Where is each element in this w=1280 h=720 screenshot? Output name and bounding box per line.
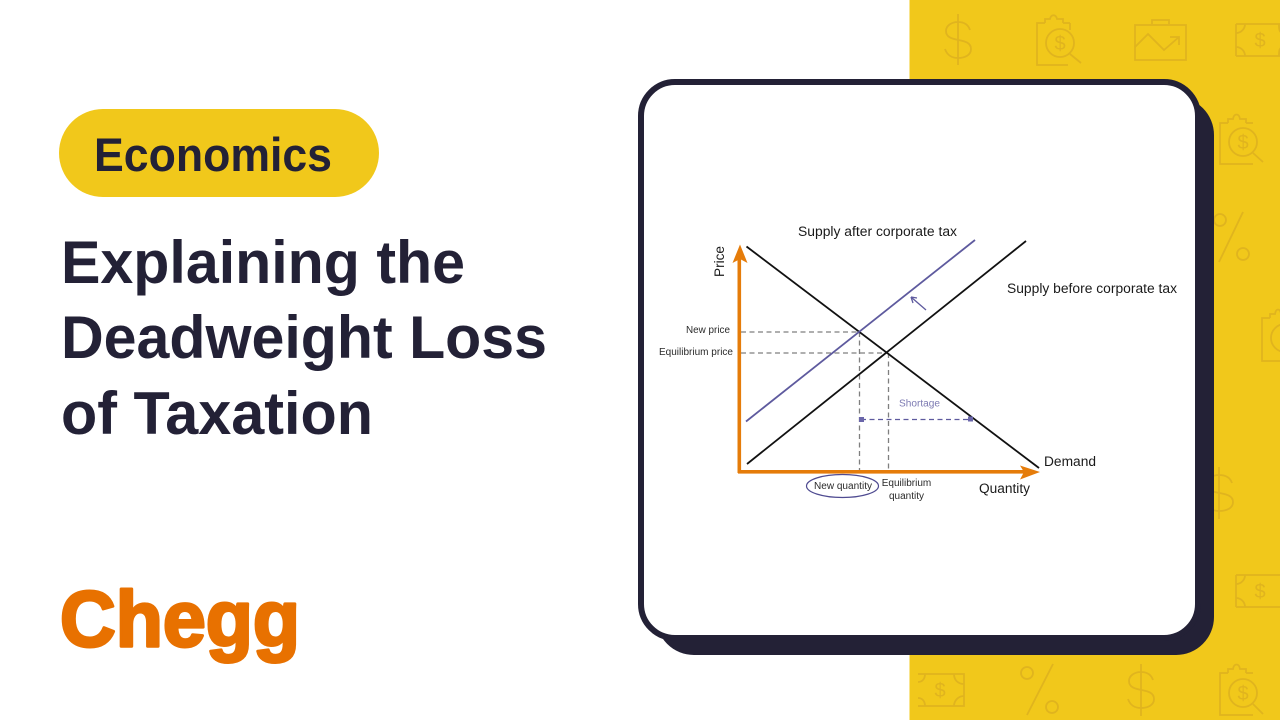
supply and demand chart (659, 224, 1177, 502)
icon: clipboard search bottom: $ (1237, 683, 1249, 705)
label: new price: New price (686, 325, 730, 336)
icon: clipboard search top (1037, 15, 1081, 65)
label: shortage: Shortage (899, 398, 940, 410)
icon: dollar right (1206, 467, 1233, 519)
label: demand: Demand (1044, 454, 1096, 469)
icon: money right: $ (1254, 581, 1266, 603)
icon: dollar bottom (1128, 664, 1154, 716)
supply before tax line (747, 241, 1026, 464)
title: of Taxation (61, 380, 373, 447)
shift arrow (911, 297, 926, 310)
yellow background panel (910, 0, 1280, 720)
category pill: Economics (94, 128, 332, 181)
label: quantity: Quantity (979, 481, 1030, 496)
shortage indicator (859, 416, 973, 422)
title: Deadweight Loss (61, 304, 547, 371)
icon: clipboard search right (1220, 114, 1263, 164)
icon: briefcase chart (1135, 20, 1186, 60)
label: equilibrium price: Equilibrium price (659, 347, 733, 358)
Chegg logo: Chegg (60, 574, 300, 663)
demand line (746, 246, 1039, 468)
dashed guide lines (741, 332, 888, 471)
icon pattern (918, 14, 1280, 716)
icon: clipboard search partial (1262, 310, 1280, 361)
label: new quantity: New quantity (814, 481, 872, 492)
icon: money top: $ (1254, 30, 1266, 52)
icon: clipboard search top: $ (1054, 33, 1066, 55)
icon: money top (1236, 24, 1280, 56)
icon: money bottom (918, 674, 964, 706)
icon: money right (1236, 575, 1280, 607)
label: equilibrium quantity: Equilibrium (882, 478, 931, 489)
label: price axis: Price (712, 246, 727, 277)
title: Explaining the (61, 229, 465, 296)
icon: clipboard search bottom (1220, 664, 1263, 715)
icon: percent bottom (1021, 664, 1058, 715)
title (61, 229, 547, 447)
label: equilibrium quantity: quantity (889, 491, 924, 502)
label: supply before: Supply before corporate tax (1007, 281, 1177, 296)
icon: money bottom: $ (934, 680, 946, 702)
quantity axis (738, 466, 1040, 480)
card shadow (656, 97, 1214, 655)
icon: clipboard search right: $ (1237, 132, 1249, 154)
chart labels (659, 224, 1177, 502)
new quantity ellipse (806, 474, 878, 498)
icon: percent right (1214, 212, 1249, 262)
card (641, 82, 1198, 638)
supply after tax line (746, 240, 975, 422)
icon: dollar top (945, 14, 971, 65)
price axis (732, 244, 748, 473)
label: supply after: Supply after corporate tax (798, 224, 957, 239)
category pill (59, 109, 379, 197)
